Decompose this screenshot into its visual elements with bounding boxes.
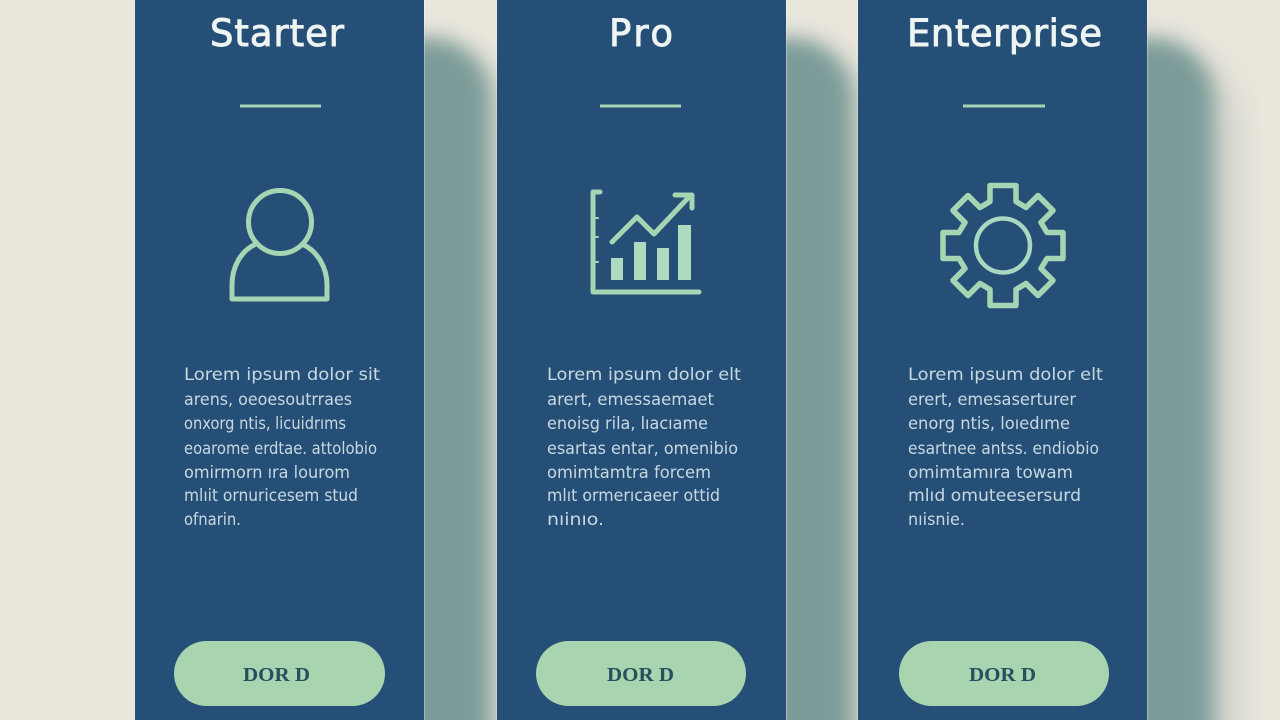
text block: Pro description: nıinıo. [547, 510, 604, 529]
heading: Enterprise: Enterprise [907, 12, 1102, 55]
text block: Enterprise description: enorg ntis, loıedıme [908, 414, 1070, 433]
button: DOR D [607, 664, 674, 686]
text block: Enterprise description: Lorem ipsum dolor elt [908, 365, 1104, 384]
text block: Pro description: Lorem ipsum dolor elt [547, 365, 742, 384]
text block: Enterprise description: mlıd omuteesersurd [908, 486, 1081, 505]
text block: Starter description [184, 365, 381, 529]
divider [963, 104, 1045, 108]
text block: Enterprise description: omimtamıra towam [908, 463, 1073, 482]
button [536, 641, 746, 706]
icon: bar chart with rising arrow [593, 192, 699, 292]
text block: Starter description: onxorg ntis, licuidrıms [184, 414, 346, 433]
text block: Starter description: ofnarin. [184, 510, 241, 529]
heading: Pro: Pro [609, 12, 673, 55]
text block: Pro description: mlıt ormerıcaeer ottid [547, 486, 720, 505]
text block: Pro description [547, 365, 742, 529]
text block: Pro description: omimtamtra forcem [547, 463, 711, 482]
panel: Starter [135, 0, 424, 720]
text block: Starter description: arens, oeoesoutrraes [184, 390, 352, 409]
text block: Enterprise description: nıisnie. [908, 510, 965, 529]
text block: Enterprise description: esartnee antss. endiobio [908, 439, 1099, 458]
card shadow: Starter [424, 24, 497, 720]
text block: Starter description: Lorem ipsum dolor sit [184, 365, 381, 384]
panel: Pro [497, 0, 786, 720]
button: DOR D [243, 664, 310, 686]
card shadow: Pro [786, 24, 858, 720]
icon: gear [943, 186, 1063, 306]
divider [600, 104, 681, 108]
divider [240, 104, 321, 108]
heading: Starter: Starter [210, 12, 345, 55]
card shadow: Enterprise [1147, 24, 1244, 720]
text block: Starter description: omirmorn ıra lourom [184, 463, 350, 482]
text block: Enterprise description [908, 365, 1104, 529]
button [899, 641, 1109, 706]
text block: Enterprise description: erert, emesaserturer [908, 390, 1076, 409]
text block: Pro description: enoisg rila, lıacıame [547, 414, 708, 433]
button [174, 641, 385, 706]
text block: Pro description: arert, emessaemaet [547, 390, 715, 409]
button: DOR D [969, 664, 1036, 686]
text block: Starter description: mlıit ornuricesem stud [184, 486, 358, 505]
icon: person [232, 190, 327, 299]
text block: Starter description: eoarome erdtae. attolobio [184, 439, 377, 458]
panel: Enterprise [858, 0, 1147, 720]
text block: Pro description: esartas entar, omenibio [547, 439, 738, 458]
